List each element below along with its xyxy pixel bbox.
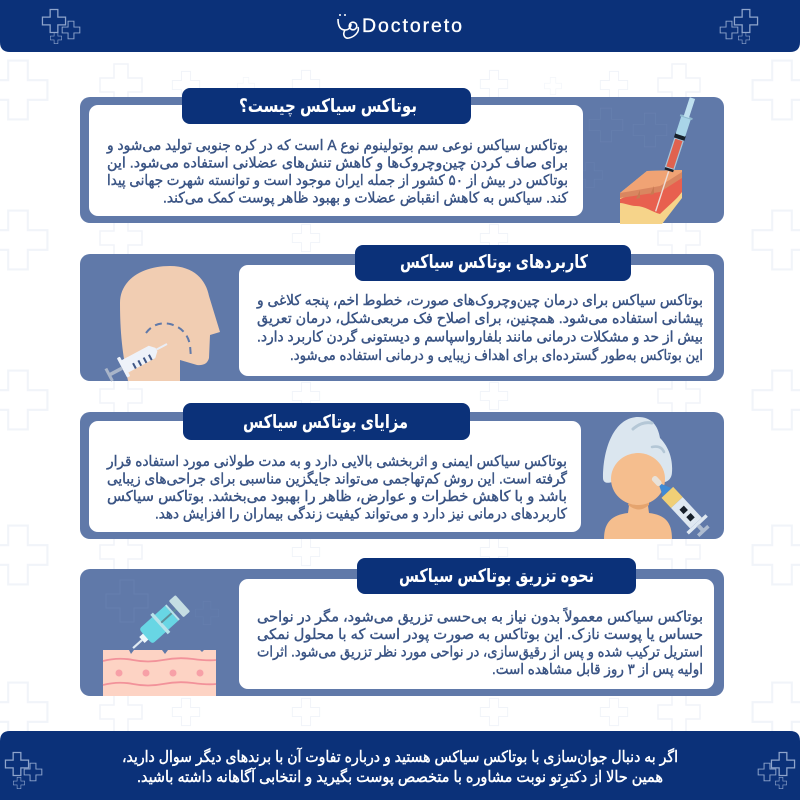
icon: footer crosses right bbox=[758, 752, 795, 789]
text block: what is Botox: کند. سیاکس به کاهش انقباض عضلات و بهبود ظاهر پوست کمک می‌کند. bbox=[163, 190, 568, 206]
icon: head with syringe bbox=[103, 266, 220, 385]
panel: benefits of Botox bbox=[80, 403, 724, 541]
panel: uses of Botox bbox=[80, 245, 724, 385]
footer bar bbox=[0, 731, 800, 800]
text block: benefits of Botox: گرفته است. این روش کم‌تهاجمی می‌تواند جایگزین مناسبی برای جراحی‌های زیبایی bbox=[107, 470, 567, 488]
header bar bbox=[0, 0, 800, 52]
text block: uses of Botox: بوتاکس سیاکس برای درمان چین‌وچروک‌های صورت، خطوط اخم، پنجه کلاغی و bbox=[256, 293, 703, 309]
text block: what is Botox bbox=[106, 138, 568, 206]
icon: header crosses left bbox=[42, 9, 80, 44]
text block: what is Botox: بوتاکس در بیش از ۵۰ کشور از جمله ایران موجود است و توانسته شهرت جهانی پیدا bbox=[107, 173, 568, 189]
panel: how Botox is injected bbox=[80, 558, 724, 696]
heading: uses of Botox: کاربردهای بوتاکس سیاکس bbox=[400, 251, 588, 273]
text block: benefits of Botox: باشد و با کاهش خطرات و عوارض، ظاهر را بهبود می‌بخشد. بوتاکس سیاکس bbox=[107, 489, 567, 505]
heading: uses of Botox bbox=[355, 245, 631, 281]
text block: uses of Botox: بیش از حد و مشکلات درمانی مانند بلفارواسپاسم و دیستونی گردن کاربرد دارد. bbox=[257, 328, 703, 346]
text block: what is Botox: برای صاف کردن چین‌وچروک‌ها و کاهش تنش‌های عضلانی استفاده می‌شود. این bbox=[107, 156, 568, 172]
text block: benefits of Botox bbox=[106, 454, 567, 522]
text block: what is Botox: بوتاکس سیاکس نوعی سم بوتولینوم نوع A است که در کره جنوبی تولید می‌شود و bbox=[106, 138, 568, 154]
icon: footer crosses left bbox=[5, 752, 42, 789]
heading: how Botox is injected: نحوه تزریق بوتاکس سیاکس bbox=[399, 565, 594, 587]
text block: how Botox is injected: اولیه پس از ۳ روز قابل مشاهده است. bbox=[492, 662, 703, 678]
text block: how Botox is injected bbox=[257, 607, 703, 678]
text block: uses of Botox bbox=[256, 293, 703, 364]
footer text: همین حالا از دکترِتو نوبت مشاوره با متخصص پوست بگیرید و انتخابی آگاهانه داشته باشید. bbox=[137, 767, 663, 789]
text block: uses of Botox: این بوتاکس به‌طور گسترده‌ای برای اهداف زیبایی و درمانی استفاده می‌شود. bbox=[290, 347, 703, 364]
panel: what is Botox bbox=[80, 88, 724, 224]
icon: skin and syringe bbox=[103, 594, 216, 696]
text block: how Botox is injected: استریل ترکیب شده و پس از رقیق‌سازی، در نواحی مورد نظر تزریق می‌شود. اثرات bbox=[257, 644, 703, 660]
heading: what is Botox: بوتاکس سیاکس چیست؟ bbox=[239, 95, 417, 117]
text block: how Botox is injected: بوتاکس سیاکس معمولاً بدون نیاز به بی‌حسی تزریق می‌شود، مگر در نواحی bbox=[257, 607, 703, 626]
icon: woman with towel and syringe bbox=[603, 417, 714, 541]
icon: skin with syringe bbox=[620, 96, 699, 224]
text block: how Botox is injected: حساس یا پوست نازک. این بوتاکس به صورت پودر است که با محلول نمکی bbox=[257, 627, 703, 643]
footer text: اگر به دنبال جوان‌سازی با بوتاکس سیاکس هستید و درباره تفاوت آن با برندهای دیگر سوال دارید، bbox=[122, 747, 678, 767]
text block: benefits of Botox: بوتاکس سیاکس ایمنی و اثربخشی بالایی دارد و به مدت طولانی مورد استفاده قرار bbox=[106, 454, 567, 470]
heading: what is Botox bbox=[182, 88, 471, 124]
icon: header crosses right bbox=[720, 9, 758, 44]
heading: benefits of Botox: مزایای بوتاکس سیاکس bbox=[243, 411, 408, 433]
footer text bbox=[122, 747, 678, 789]
text block: benefits of Botox: کاربردهای درمانی نیز دارد و می‌تواند کیفیت زندگی بیماران را افزایش دهد. bbox=[155, 506, 567, 522]
logo: Doctoreto: Doctoreto bbox=[362, 15, 462, 37]
heading: how Botox is injected bbox=[357, 558, 636, 594]
heading: benefits of Botox bbox=[183, 403, 470, 440]
text block: uses of Botox: پیشانی استفاده می‌شود. همچنین، برای اصلاح فک مربعی‌شکل، درمان تعریق bbox=[257, 311, 703, 327]
